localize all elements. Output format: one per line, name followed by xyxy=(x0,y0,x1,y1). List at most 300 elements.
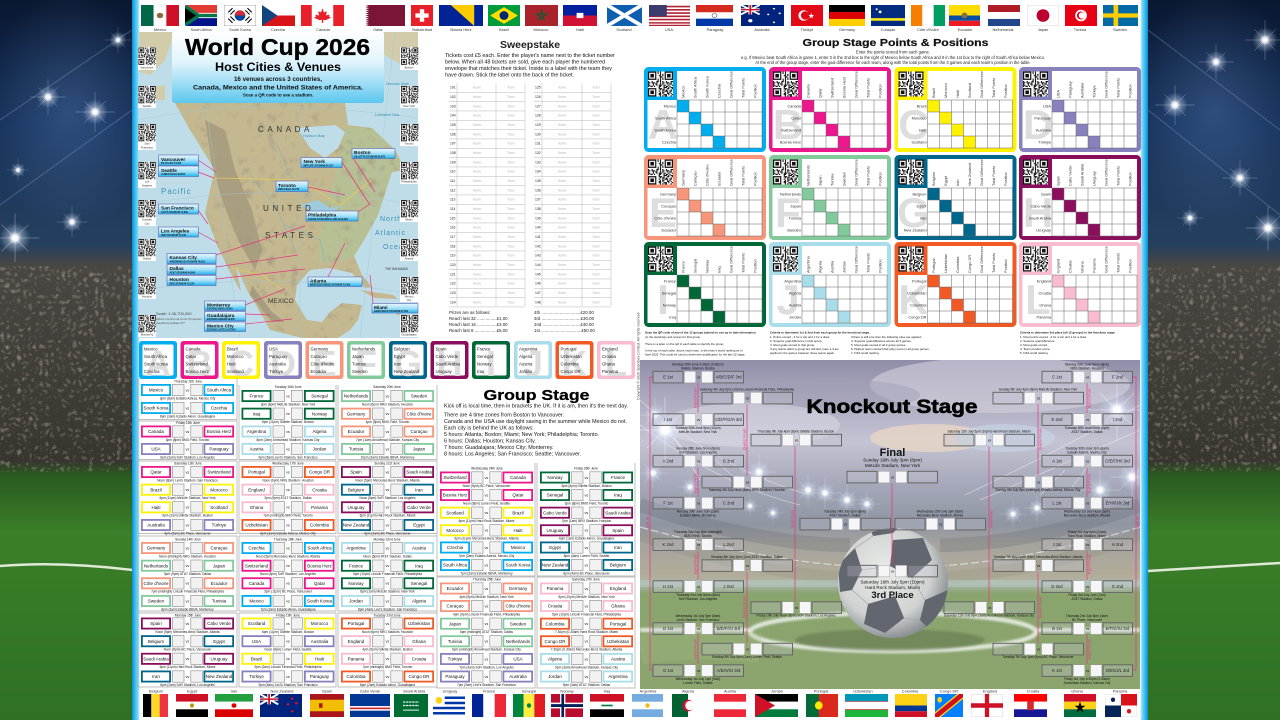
notes: third place criteria: Criteria to determine 3rd place (all 12 groups) to the knockout stage. xyxy=(1020,330,1116,334)
match: Congo DR v Uzbekistan: Congo DR xyxy=(544,639,566,644)
match: Colombia v Congo DR: 8pm (2am) Estadio Akron, Guadalajara xyxy=(360,683,415,687)
match: Ghana v Panama: 7pm (midnight) BMO Field, Toronto xyxy=(263,514,313,518)
match: A 1st v 3rd: Estadio Azteca, Mexico City xyxy=(1067,450,1107,454)
table: Group H: Spain xyxy=(1041,192,1051,196)
intro text: 16 venues across 3 countries, xyxy=(234,76,322,83)
table: Group F: Japan xyxy=(790,204,801,208)
match: South Korea v Czechia xyxy=(142,402,233,418)
table: Group L: L xyxy=(1025,276,1051,323)
flag: Tunisia xyxy=(1065,5,1097,32)
match: Congo DR v Uzbekistan: Uzbekistan xyxy=(607,639,630,644)
flag: Qatar xyxy=(351,5,405,32)
table: Group K: Uzbekistan xyxy=(907,290,926,296)
match: Algeria v Austria: Algeria xyxy=(548,657,562,662)
table: Group E: Curaçao xyxy=(661,204,676,208)
sweepstake table: 147 xyxy=(535,291,541,295)
QR: Los Angeles: Los xyxy=(145,180,150,184)
flag: Bosnia Herz xyxy=(439,5,483,32)
table: Group J: Argentina xyxy=(806,256,810,273)
match: Belgium v Egypt: Noon (8pm) BC Place, Vancouver xyxy=(164,648,212,652)
match: Uruguay v Spain: Spain xyxy=(612,528,624,533)
chip: Group H: H xyxy=(436,343,462,384)
match: E 2nd v I 2nd: I 2nd xyxy=(1113,417,1123,422)
match: Friday 10th July Los Angeles xyxy=(751,602,842,618)
match: D 2nd v G 2nd: D 2nd xyxy=(1051,584,1063,589)
table: Group A: Czechia xyxy=(716,83,722,98)
match: I 1st v 3rd: I 1st xyxy=(664,417,673,422)
match: Iran v New Zealand xyxy=(142,671,233,687)
instructions: e.g. If Mexico beat South Africa in game 1, enter 3 in the 2nd box to the right of Mexico below South Africa and 0 in the 1st box to the right of South Africa below Mexico. xyxy=(741,55,1045,60)
instructions: At the end of the group stage, enter the goal difference for each team, along with the total points from the 3 games and each team's position in the table. xyxy=(755,60,1031,65)
table: Group E: E xyxy=(649,189,677,236)
match: Tunisia v Netherlands: 6pm (midnight) Arrowhead Stadium, Kansas City xyxy=(452,648,521,652)
chip: Group I: France xyxy=(477,346,491,352)
match: Paraguay v Australia: Australia xyxy=(509,674,527,679)
sweepstake table: Team xyxy=(592,179,600,183)
match: South Africa v South Korea: South Africa xyxy=(443,563,468,568)
QR: Toronto xyxy=(400,124,418,146)
match: Austria v Jordan: Jordan xyxy=(313,447,327,452)
match: Curaçao v Côte d'Ivoire xyxy=(441,600,532,616)
sweepstake table: Name xyxy=(473,132,481,136)
match: K 2nd v L 2nd: BMO Field, Toronto xyxy=(684,534,712,538)
kick-off note: Kick off is local time, then in brackets the UK. If it is am, then it's the next day. xyxy=(444,404,628,410)
date: Tuesday 16th June: Tuesday 16th June xyxy=(274,385,302,389)
match: England v Croatia: Croatia xyxy=(312,487,327,492)
match: Colombia v Portugal: 7.30pm (0.30am) Hard Rock Stadium, Miami xyxy=(555,630,618,634)
match: C 1st v F 2nd xyxy=(1042,362,1132,383)
sweepstake table: 119 xyxy=(450,254,456,258)
date: Tuesday 23rd June: Tuesday 23rd June xyxy=(373,614,401,618)
sweepstake table: 133 xyxy=(535,160,541,164)
time zones text: 6 hours: Dallas; Houston; Kansas City. xyxy=(444,438,536,444)
sweepstake table: 116 xyxy=(450,226,456,230)
match: Scotland v Brazil: Brazil xyxy=(512,510,524,515)
match: E 1st v 3rd xyxy=(653,362,744,383)
match: Spain v Saudi Arabia: Saudi Arabia xyxy=(406,470,432,475)
match: D 1st v 3rd: Levi's Stadium, San Francisco xyxy=(677,618,720,622)
table: Group K: Portugal xyxy=(931,258,936,273)
flag: Bosnia Herz: Bosnia Herz xyxy=(450,27,472,32)
QR: Philadelphia: Philadelphia xyxy=(401,180,417,184)
third place play-off: Saturday 18th July 5pm (10pm) xyxy=(860,580,925,584)
sweepstake table: Team xyxy=(507,151,515,155)
sweepstake table: Team xyxy=(507,179,515,183)
sweepstake table: 122 xyxy=(450,282,456,286)
sweepstake table: 138 xyxy=(535,207,541,211)
table: Group G: Egypt xyxy=(917,204,927,208)
chip: Group A: A xyxy=(145,343,171,384)
chip: Group K: Congo DR xyxy=(560,369,581,374)
sweepstake table: Name xyxy=(558,244,566,248)
match: Austria v Jordan: 9pm (5am) Levi's Stadium, San Francisco xyxy=(258,455,318,459)
match: Argentina v Algeria: Algeria xyxy=(312,429,327,434)
match: Scotland v Morocco xyxy=(242,618,334,634)
sweepstake table: Team xyxy=(507,188,515,192)
sweepstake instructions: below. When all 48 tickets are sold, give each player the numbered xyxy=(445,60,605,66)
match: Croatia v Ghana: Croatia xyxy=(548,604,563,609)
table: Group E: Côte d'Ivoire xyxy=(654,216,676,220)
match: Iraq v Norway: Norway xyxy=(312,411,328,416)
match: Argentina v Algeria: 8pm (2am) Arrowhead Stadium, Kansas City xyxy=(257,438,320,442)
map: host cities and venues: MEXICO xyxy=(268,298,294,305)
QR: Vancouver: Vancouver xyxy=(140,66,154,70)
table: Group J: J xyxy=(776,276,800,323)
flag: Australia xyxy=(741,5,784,32)
label: Seattle: LUMEN FIELD 69,000 xyxy=(161,173,186,176)
match: New Zealand v Belgium xyxy=(541,559,632,575)
sweepstake table: Team xyxy=(592,160,600,164)
label: Los Angeles: Los Angeles xyxy=(161,229,190,235)
match: Spain v Cabo Verde xyxy=(142,618,233,634)
match: Sweden v Tunisia: 8pm (3am) Estadio BBVA, Monterrey xyxy=(161,607,214,611)
match: Argentina v Austria: Austria xyxy=(412,546,426,551)
flag: Qatar: Qatar xyxy=(373,27,384,32)
table: Group J: Argentina xyxy=(784,278,802,284)
table: Group J: Algeria xyxy=(818,260,822,273)
notes: first and second place criteria: 4. Superior goal difference across all 3 games. xyxy=(851,339,912,343)
match: Tunisia v Netherlands: Netherlands xyxy=(506,639,531,644)
table: Group F: F xyxy=(775,189,801,236)
match: Saturday 11th July Kansas City xyxy=(944,602,1034,618)
match: South Africa v South Korea: 7pm (2am) Estadio BBVA, Monterrey xyxy=(460,571,513,575)
match: Brazil v Haiti xyxy=(242,653,334,669)
table: Group F: Tunisia xyxy=(830,173,834,186)
sweepstake table: 146 xyxy=(535,282,541,286)
table: Group F: Sweden xyxy=(842,172,846,186)
table: Group C: Haiti xyxy=(919,128,927,132)
match: Cabo Verde v Saudi Arabia: Cabo Verde xyxy=(543,510,567,515)
flag: Senegal xyxy=(513,688,545,717)
notes: QR and table guide: April 2025. This could be used to determine qualification for the last 32 stage. xyxy=(645,352,746,356)
match: Cabo Verde v Saudi Arabia: 7pm (1am) NRG Stadium, Houston xyxy=(562,519,612,523)
intro text: Scan a QR code to see a stadium. xyxy=(243,92,313,98)
match: Tunisia v Japan: Japan xyxy=(413,447,426,452)
chip: Group F: Netherlands xyxy=(352,346,375,352)
match: Morocco v Haiti: Morocco xyxy=(446,528,464,533)
match: Congo DR v Uzbekistan: 7.30pm (0.30am) Mercedes-Benz Stadium, Atlanta xyxy=(551,648,623,652)
flag: Ghana: Ghana xyxy=(1071,688,1084,694)
match: Australia v Türkiye xyxy=(142,519,233,535)
match: Côte d'Ivoire v Ecuador: 7pm (midnight) Lincoln Financial Field, Philadelphia xyxy=(151,590,224,594)
match: Germany v Côte d'Ivoire: 4pm (9pm) BMO Field, Toronto xyxy=(366,420,410,424)
label: Miami xyxy=(372,304,418,313)
sweepstake table: Name xyxy=(473,170,481,174)
notes: QR and table guide: There is a letter on the left in each table to identify the group. xyxy=(645,342,724,346)
match: J 1st v H 2nd: Friday 3rd July 6pm (11pm) xyxy=(1068,530,1106,534)
match: Ecuador v Germany: 4pm (9pm) MetLife Stadium, New York xyxy=(459,595,514,599)
sweepstake table: 120 xyxy=(450,263,456,267)
sweepstake table: 107 xyxy=(450,142,456,146)
match: J 1st v H 2nd: J 1st xyxy=(1053,542,1062,547)
match: I 1st v 3rd: MetLife Stadium, New York xyxy=(679,430,718,434)
table: Group L: Croatia xyxy=(1068,260,1072,273)
flag: Morocco xyxy=(525,5,558,32)
sweepstake instructions: envelope that matches their ticket. Inside is a label with the team they xyxy=(445,66,612,72)
flag: England: England xyxy=(983,688,997,694)
chip: Group F xyxy=(347,341,385,384)
match: C 1st v F 2nd: C 1st xyxy=(1052,374,1063,380)
table: Group L: England xyxy=(1056,259,1060,273)
match: D 2nd v G 2nd xyxy=(1042,581,1132,601)
QR: Vancouver xyxy=(138,47,156,70)
sweepstake table: Team xyxy=(592,132,600,136)
map: host cities and venues: Atlantic xyxy=(375,230,406,237)
match: Scotland v Morocco: Scotland xyxy=(248,621,266,626)
table: Group A: Mexico xyxy=(664,104,676,108)
table: Group G: Belgium xyxy=(912,192,926,196)
match: Austria v Jordan xyxy=(242,443,334,459)
match: Iraq v Norway xyxy=(242,408,334,424)
label: Monterrey xyxy=(204,301,246,310)
flag: Panama: Panama xyxy=(1113,688,1128,694)
match: Algeria v Austria: 9pm (3am) Arrowhead Stadium, Kansas City xyxy=(555,665,618,669)
flag: New Zealand xyxy=(260,688,302,717)
sweepstake table: Team xyxy=(507,226,515,230)
chip: Group L: Panama xyxy=(602,369,619,374)
table: Group E: Côte d'Ivoire xyxy=(704,164,710,186)
match: B 1st v 3rd: BC Place, Vancouver xyxy=(1072,618,1103,622)
chip: Group A: Czechia xyxy=(144,369,160,374)
flag: Congo DR: Congo DR xyxy=(940,688,958,694)
table: Group A: South Korea xyxy=(704,76,710,98)
map: host cities and venues: Albers Conformal Conic Projection xyxy=(156,317,202,321)
sweepstake table: Name xyxy=(558,95,566,99)
match: Tuesday 14th July Dallas: AT&T Stadium, Dallas xyxy=(829,513,861,517)
sweepstake table: 109 xyxy=(450,160,456,164)
date: Friday 26th June: Friday 26th June xyxy=(574,466,598,470)
panel: sweepstake xyxy=(445,39,615,333)
match: New Zealand v Belgium: Belgium xyxy=(610,563,626,568)
match: K 1st v 3rd xyxy=(1042,665,1132,685)
match: Scotland v Morocco: Morocco xyxy=(311,621,329,626)
match: Scotland v Brazil: 6pm (11pm) Hard Rock Stadium, Miami xyxy=(459,519,515,523)
match: Tuesday 14th July Dallas: Tuesday 14th July 2pm (8pm) xyxy=(824,510,866,514)
flag: France xyxy=(472,688,506,717)
sweepstake table: Name xyxy=(473,104,481,108)
third place play-off: 3rd Place xyxy=(871,590,914,601)
label: San Francisco: LEVI'S STADIUM 70,909 xyxy=(161,211,188,214)
match: A 2nd v B 2nd xyxy=(653,446,744,467)
flag: Haiti xyxy=(563,5,597,32)
bracket lines: Eighth Finals xyxy=(1088,639,1092,659)
chip: Group B: Switzerland xyxy=(186,362,208,366)
table: Group C: Morocco xyxy=(943,83,948,98)
chip: Group A: Mexico xyxy=(144,346,158,352)
sweepstake table: Name xyxy=(473,235,481,239)
match: I 1st v 3rd: C/D/F/G/H 3rd xyxy=(715,417,743,422)
sweepstake table: Name xyxy=(558,142,566,146)
match: L 1st v 3rd: E/H/I/J/K 3rd xyxy=(1106,500,1130,506)
chip: Group L: England xyxy=(602,346,618,352)
match: Côte d'Ivoire v Ecuador xyxy=(142,578,233,594)
chip: Group K xyxy=(556,341,594,384)
match: Ghana v Panama: Panama xyxy=(311,505,328,510)
last 16 matches xyxy=(700,387,1084,659)
chip: Group F: F xyxy=(355,343,377,384)
table: Group L: Croatia xyxy=(1038,290,1052,296)
map: host cities and venues: Ocean xyxy=(383,244,409,251)
label: Guadalajara: ESTADIO AKRON 49,850 xyxy=(207,318,235,321)
bracket lines: Eighth Finals xyxy=(1088,473,1092,493)
sweepstake table: 131 xyxy=(535,142,541,146)
match: Spain v Saudi Arabia: Spain xyxy=(350,470,362,475)
match: Brazil v Morocco: 6pm (11pm) MetLife Stadium, New York xyxy=(159,496,216,500)
panel: group stage points and positions xyxy=(644,37,1141,356)
match: Czechia v Mexico: Mexico xyxy=(511,545,526,550)
match: Norway v Senegal xyxy=(342,578,433,594)
match: G 1st v 3rd: Lumen Field, Seattle xyxy=(683,681,713,685)
sweepstake table: Name xyxy=(558,254,566,258)
bracket lines: Eighth Finals xyxy=(694,639,698,659)
flag: Scotland: Scotland xyxy=(616,27,632,32)
match: USA v Australia xyxy=(242,636,334,652)
match: Tunisia v Japan: Tunisia xyxy=(349,447,364,452)
match: Brazil v Morocco xyxy=(142,484,233,500)
flag: Norway: Norway xyxy=(560,688,574,694)
match: Cabo Verde v Saudi Arabia xyxy=(541,507,632,523)
match: Croatia v Ghana xyxy=(541,600,632,616)
table: Group G: New Zealand xyxy=(904,228,926,232)
flag: South Korea xyxy=(224,5,256,32)
match: Curaçao v Côte d'Ivoire: Curaçao xyxy=(446,604,464,609)
group chips row xyxy=(139,341,635,384)
flag: Tunisia: Tunisia xyxy=(1074,27,1087,32)
match: I 1st v 3rd: Tuesday 30th June 5pm (10pm) xyxy=(675,426,721,430)
match: E 2nd v I 2nd xyxy=(1042,414,1132,434)
match: Czechia v South Africa xyxy=(242,542,334,558)
table: Group H xyxy=(1019,155,1141,240)
flag: Egypt: Egypt xyxy=(187,688,198,694)
table: Group A: Mexico xyxy=(680,86,686,98)
match: Monday 6th July Dallas: Monday 6th July 2pm (7pm) AT&T Stadium, Dallas xyxy=(711,555,783,559)
match: B 1st v 3rd: B 1st xyxy=(1052,626,1063,631)
table: Group I: Senegal xyxy=(692,259,698,273)
match: Saturday 11th July Miami xyxy=(944,429,1034,446)
bracket lines: Eighth Finals xyxy=(694,388,698,408)
chip: Group C: Haiti xyxy=(227,362,236,366)
table: Group A: South Africa xyxy=(655,116,677,120)
sweepstake table: Team xyxy=(507,282,515,286)
match: Switzerland v Bosnia Herz: Bosnia Herz xyxy=(307,563,333,568)
fixtures: column 2 xyxy=(242,385,334,687)
QR: Mexico City xyxy=(400,277,418,302)
sweepstake table: Team xyxy=(507,235,515,239)
notes: third place criteria: 2. Superior goal difference. xyxy=(1020,339,1055,343)
match: USA v Paraguay: Paraguay xyxy=(209,447,229,452)
table: Group C: Scotland xyxy=(911,140,926,144)
match: Uzbekistan v Colombia: Uzbekistan xyxy=(245,523,268,528)
table: Group G: Iran xyxy=(920,216,926,220)
chip: Group L: Croatia xyxy=(602,354,616,359)
match: Jordan v Argentina: Jordan xyxy=(548,674,562,679)
flag: Haiti: Haiti xyxy=(576,27,584,32)
map: host cities and venues: standard parallels 37° xyxy=(156,321,186,325)
match: Saturday 11th July Kansas City: Saturday 11th July 8pm (3am) Arrowhead Stadium, Kansas City xyxy=(944,614,1034,618)
match: New Zealand v Belgium: New Zealand xyxy=(542,563,569,568)
table: Group L: Panama xyxy=(1036,314,1052,320)
sweepstake table: 123 xyxy=(450,291,456,295)
fixtures: column 1 xyxy=(142,380,233,687)
table: Group B: Switzerland xyxy=(830,78,834,98)
table: Group B: B xyxy=(773,101,803,148)
sweepstake table: 132 xyxy=(535,151,541,155)
notes: first and second place criteria: 1. Points scored - 3 for a win and 1 for a draw. xyxy=(770,335,830,339)
sweepstake table: Name xyxy=(558,132,566,136)
flag: Iran xyxy=(215,688,253,717)
match: Uruguay v Cabo Verde: 6pm (11pm) Hard Rock Stadium, Miami xyxy=(360,514,416,518)
heading: Knockout Stage: Knockout Stage xyxy=(806,397,978,418)
sweepstake table: 104 xyxy=(450,114,456,118)
final xyxy=(847,447,938,483)
match: Morocco v Haiti: 6pm (11pm) Mercedes-Benz Stadium, Atlanta xyxy=(454,537,519,541)
QR: Kansas City xyxy=(138,200,156,226)
match: Egypt v Iran: Iran xyxy=(614,545,622,550)
match: Switzerland v Canada: Switzerland xyxy=(443,475,467,480)
last 32: left side xyxy=(653,362,744,685)
match: Ghana v Panama: Ghana xyxy=(250,505,264,510)
match: Canada v Qatar: Qatar xyxy=(314,581,326,586)
flag: Scotland xyxy=(607,5,642,32)
knockout background: stadium and ball xyxy=(632,357,1154,689)
sweepstake table: Name xyxy=(473,151,481,155)
label: Los Angeles xyxy=(158,227,198,237)
flag: Morocco: Morocco xyxy=(534,27,548,32)
match: Uzbekistan v Colombia xyxy=(242,519,334,535)
notes: first and second place criteria: If any teams within a group are still tied, rules 1-3 are xyxy=(770,347,839,351)
match: Argentina v Algeria xyxy=(242,426,334,442)
match: D 1st v 3rd xyxy=(653,614,744,634)
match: Canada v Qatar xyxy=(242,578,334,594)
match: K 1st v 3rd: Arrowhead Stadium, Kansas City xyxy=(1064,681,1111,685)
label: San Francisco: San Francisco xyxy=(161,206,194,212)
match: Jordan v Algeria: Jordan xyxy=(349,599,363,604)
sweepstake table: Team xyxy=(592,151,600,155)
match: Norway v Senegal: Senegal xyxy=(411,581,427,586)
date: Wednesday 17th June: Wednesday 17th June xyxy=(272,462,304,466)
match: D 2nd v G 2nd: AT&T Stadium, Dallas xyxy=(1071,597,1103,601)
match: Haiti v Scotland: 9pm (2am) Gillette Stadium, Boston xyxy=(162,514,213,518)
flag: Croatia xyxy=(1014,688,1047,717)
match: Canada v Bosnia Herz xyxy=(142,426,233,442)
chip: Group D: Australia xyxy=(269,362,286,366)
flag row: top xyxy=(141,5,1138,32)
sweepstake table: 142 xyxy=(535,244,541,248)
match: Australia v Türkiye: Türkiye xyxy=(212,523,227,528)
map: host cities and venues: Hudson Bay xyxy=(303,133,325,138)
match: Austria v Jordan: Austria xyxy=(249,447,264,452)
sweepstake table: Team xyxy=(592,114,600,118)
match: Curaçao v Côte d'Ivoire: 4pm (9pm) Lincoln Financial Field, Philadelphia xyxy=(453,612,520,616)
label: Kansas City xyxy=(167,254,216,264)
QR: Miami xyxy=(400,200,418,222)
match: USA v Australia: Noon (8pm) Lumen Field, Seattle xyxy=(265,648,312,652)
match: Egypt v Iran: Egypt xyxy=(549,545,561,550)
flag: Croatia: Croatia xyxy=(1027,688,1040,694)
sweepstake table: 145 xyxy=(535,272,541,276)
flag: Portugal xyxy=(806,688,838,717)
label: New York: New York xyxy=(304,159,325,165)
chip: Group K: K xyxy=(562,343,588,384)
match: Saturday 4th July Philadelphia xyxy=(700,387,794,404)
flag: Cabo Verde xyxy=(350,688,390,717)
flag: Curaçao xyxy=(871,5,905,32)
table: Group F xyxy=(769,155,891,240)
sweepstake table: Team xyxy=(507,198,515,202)
match: Portugal v Uzbekistan: Uzbekistan xyxy=(408,621,431,626)
sweepstake table: 125 xyxy=(535,86,541,90)
match: USA v Australia: Australia xyxy=(311,639,329,644)
